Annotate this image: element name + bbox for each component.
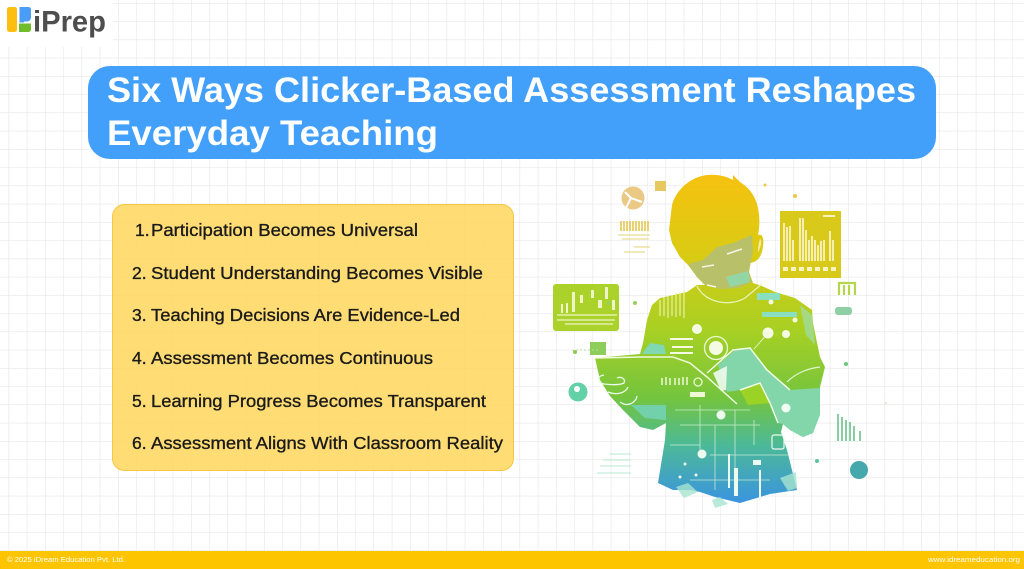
teal left-chest patch <box>642 343 666 354</box>
tablet outline <box>595 357 737 404</box>
list item 2: Student Understanding Becomes Visible <box>151 263 483 283</box>
list item 1: Participation Becomes Universal <box>151 220 418 240</box>
chest circuit nodes <box>670 300 798 355</box>
small badge right <box>835 307 852 315</box>
list item 2: 2. <box>132 263 147 283</box>
chest bars <box>660 290 684 318</box>
list item 5: 5. <box>132 391 147 411</box>
list item 3: Teaching Decisions Are Evidence-Led <box>151 305 460 325</box>
list item 6: Assessment Aligns With Classroom Reality <box>151 433 503 453</box>
torso nodes <box>678 410 761 500</box>
small yellow tag <box>655 181 666 191</box>
list item 5: Learning Progress Becomes Transparent <box>151 391 486 411</box>
shoulder highlights <box>757 293 780 300</box>
panel: six ways list <box>112 204 514 470</box>
holding fingers <box>598 375 637 404</box>
chart panel left <box>553 284 619 331</box>
footer bar <box>0 551 1024 569</box>
hand and forearm <box>718 349 820 437</box>
teal chin highlight <box>726 271 750 287</box>
barcode marks <box>618 221 650 252</box>
pie chart icon <box>622 186 644 210</box>
logo: iPrep: iPrep <box>33 6 106 38</box>
title banner: Everyday Teaching <box>107 114 438 153</box>
ear highlight <box>758 239 761 252</box>
list item 4: 4. <box>132 348 147 368</box>
website: www.idreameducation.org <box>927 557 1020 564</box>
torso circuit lines <box>670 405 790 490</box>
scattered dots and lines <box>573 184 848 463</box>
chart panel top right <box>780 211 841 278</box>
copyright: © 2025 iDream Education Pvt. Ltd. <box>7 556 125 564</box>
title banner <box>88 66 936 159</box>
right arm light patches <box>782 404 790 412</box>
list item 6: 6. <box>132 433 147 453</box>
illustration: boy reading a tablet <box>553 175 888 508</box>
face shading <box>688 235 753 289</box>
figure silhouette <box>595 175 825 503</box>
right sleeve arc <box>787 367 820 382</box>
bars bottom right <box>838 414 860 441</box>
teal circle right <box>850 461 868 479</box>
list item 3: 3. <box>132 305 147 325</box>
logo: iPrep <box>0 0 113 47</box>
frayed hem <box>676 472 797 508</box>
teal circle left <box>568 382 588 402</box>
mini bar icon right <box>839 283 855 295</box>
list item 4: Assessment Becomes Continuous <box>151 348 433 368</box>
tablet bar marks <box>662 377 687 385</box>
list item 1: 1. <box>135 220 150 240</box>
title banner: Six Ways Clicker-Based Assessment Reshapes <box>107 71 916 110</box>
closed eyes and mouth <box>702 249 742 287</box>
collar <box>697 284 762 303</box>
